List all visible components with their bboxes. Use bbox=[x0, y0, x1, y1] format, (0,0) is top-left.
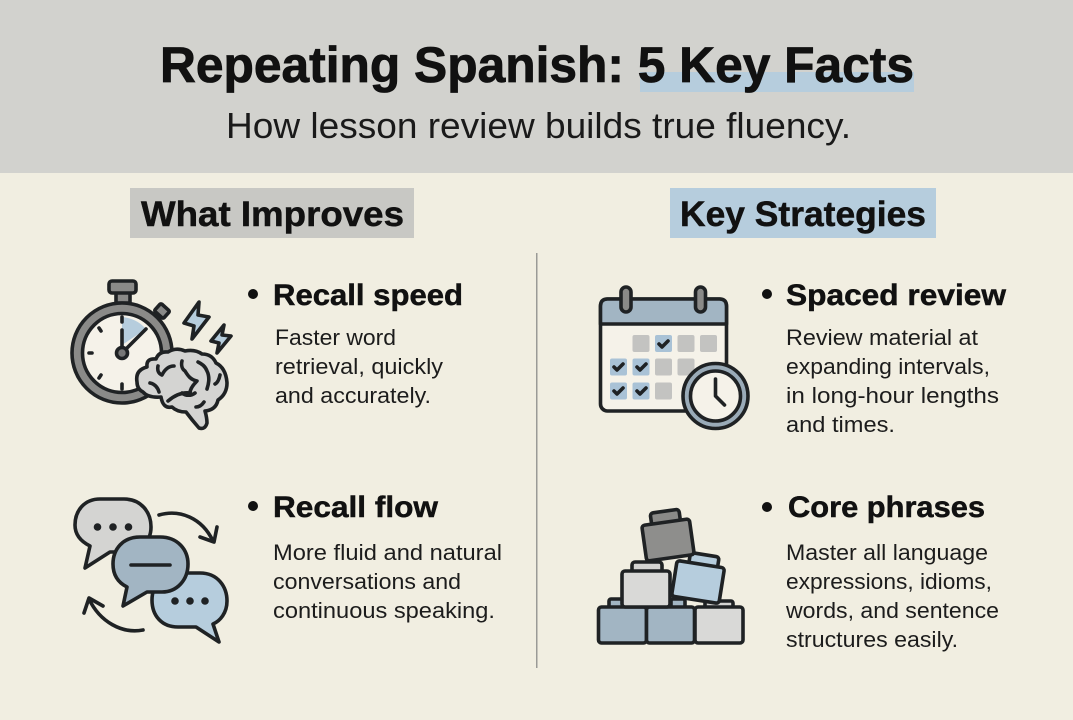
text: Recall flow: More fluid and natural bbox=[273, 540, 502, 565]
text: Spaced review bbox=[762, 279, 1007, 437]
text: Recall flow: conversations and bbox=[273, 569, 461, 594]
lightning bolts bbox=[184, 302, 209, 339]
text: Recall flow bbox=[248, 491, 502, 623]
header band bbox=[0, 0, 1073, 173]
text: Core phrases: structures easily. bbox=[786, 627, 958, 652]
icon: stacked blocks bbox=[598, 508, 743, 643]
icon: stopwatch and brain bbox=[72, 281, 231, 428]
icon: calendar and clock bbox=[600, 287, 748, 428]
text: Spaced review: in long-hour lengths bbox=[786, 383, 999, 408]
title: Repeating Spanish: 5 Key Facts bbox=[160, 37, 914, 93]
title highlight bbox=[640, 72, 914, 92]
text: Recall speed bbox=[248, 279, 463, 408]
text: Core phrases: words, and sentence bbox=[785, 598, 999, 623]
text: Spaced review: and times. bbox=[786, 412, 895, 437]
text: Core phrases bbox=[762, 491, 999, 652]
section heading: What Improves: What Improves bbox=[141, 195, 404, 234]
text: Recall speed: Recall speed bbox=[273, 279, 463, 312]
text: Spaced review: Review material at bbox=[786, 325, 978, 350]
icon: speech bubbles bbox=[75, 499, 227, 642]
section heading: Key Strategies: Key Strategies bbox=[680, 195, 926, 234]
brain bbox=[137, 349, 227, 428]
text: Recall speed: Faster word bbox=[275, 325, 396, 350]
text: Recall speed: and accurately. bbox=[275, 383, 431, 408]
text: Recall flow: Recall flow bbox=[273, 491, 439, 524]
text: Core phrases: Master all language bbox=[786, 540, 988, 565]
text: Core phrases: Core phrases bbox=[788, 491, 985, 524]
column divider bbox=[536, 253, 538, 668]
section heading: What Improves bbox=[130, 188, 414, 238]
text: Spaced review: expanding intervals, bbox=[786, 354, 990, 379]
text: Spaced review: Spaced review bbox=[786, 279, 1007, 312]
subtitle: How lesson review builds true fluency. bbox=[226, 105, 851, 146]
text: Recall flow: continuous speaking. bbox=[273, 598, 495, 623]
text: Recall speed: retrieval, quickly bbox=[275, 354, 443, 379]
text: Core phrases: expressions, idioms, bbox=[786, 569, 992, 594]
